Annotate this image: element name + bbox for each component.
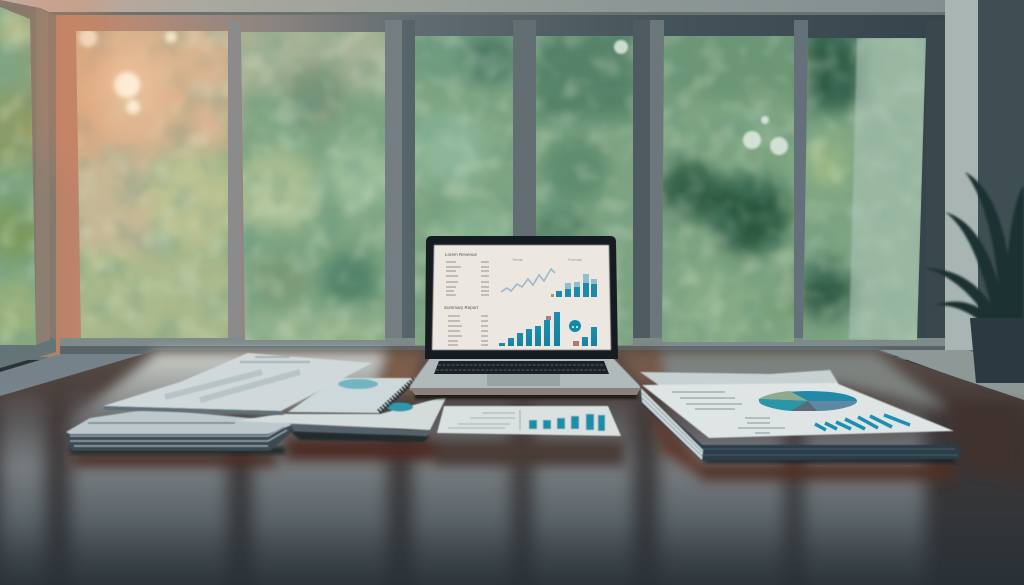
- middle chart sheet: [437, 406, 621, 436]
- foliage texture: [0, 8, 850, 340]
- table surface: [0, 350, 1024, 585]
- stack shadow: [705, 457, 955, 463]
- notebook shadow: [290, 431, 430, 442]
- laptop: [410, 236, 640, 399]
- keyboard: [434, 361, 609, 374]
- screen title text: Lorem Revenue: [445, 252, 478, 257]
- window reflections: [0, 395, 925, 585]
- mini bar chart: [815, 415, 910, 430]
- plant pot: [970, 318, 1024, 383]
- report text lines: [672, 392, 785, 433]
- brown reflections under reports: [72, 400, 1024, 480]
- laptop: Summary Report: [444, 305, 479, 310]
- screen donut icon: [569, 320, 581, 332]
- wall and window frame: [0, 0, 1024, 385]
- top loose report: [103, 353, 372, 415]
- left stack of reports: [66, 353, 447, 454]
- pie chart: [759, 391, 857, 411]
- line chart: [501, 269, 555, 292]
- right stack of reports: [640, 370, 961, 463]
- sun flare: [76, 31, 182, 154]
- stack shadow: [70, 447, 285, 454]
- trackpad: [487, 374, 560, 386]
- curtain sheen: [849, 38, 926, 340]
- laptop shadow: [415, 393, 637, 399]
- upper bar chart: [551, 283, 597, 297]
- houseplant: [925, 172, 1024, 383]
- laptop: Forecast: [568, 258, 582, 262]
- lower bar chart: [499, 312, 597, 346]
- laptop lid: [425, 236, 618, 359]
- laptop base: [410, 358, 640, 390]
- orange glow over frame: [30, 0, 110, 180]
- screen: [432, 245, 611, 350]
- screen list lines: [446, 262, 489, 345]
- floor: [0, 350, 1024, 402]
- bokeh highlights: [614, 40, 788, 155]
- forest view through windows: [0, 7, 926, 345]
- spiral notebook: [235, 378, 447, 436]
- laptop: Trends: [512, 258, 523, 262]
